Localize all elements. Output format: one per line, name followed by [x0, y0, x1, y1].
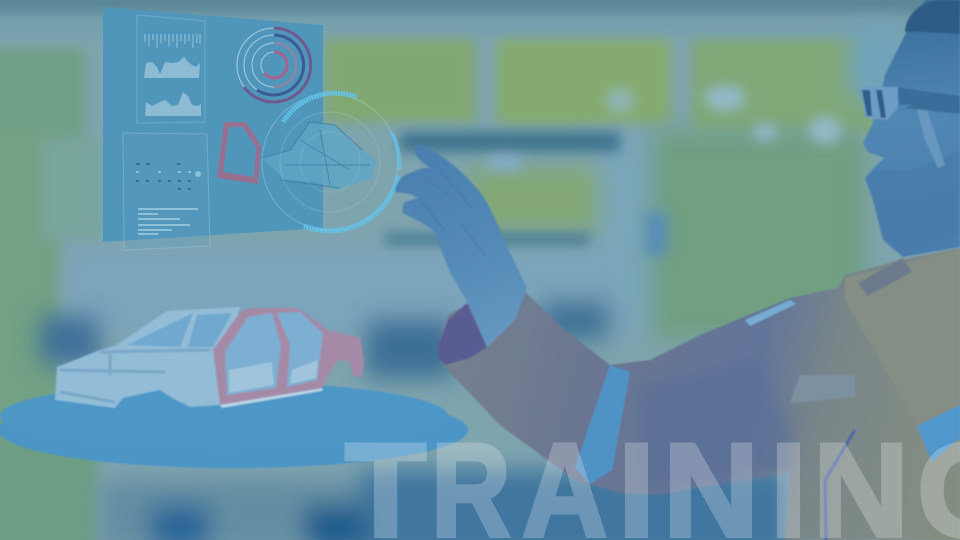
- person: [395, 0, 960, 540]
- reflective sleeve band: [575, 365, 630, 484]
- zipper: [825, 430, 855, 540]
- chart card: [137, 15, 205, 123]
- ring chart: [237, 28, 311, 102]
- cabin interior: [220, 310, 324, 398]
- jacket: [438, 248, 960, 540]
- front detail: [60, 350, 210, 402]
- platform: [0, 382, 468, 468]
- sleeve fold shadow: [640, 360, 790, 490]
- title: TRAINING: [344, 442, 960, 539]
- shoulder panel: [845, 250, 960, 425]
- temple finger: [915, 103, 945, 168]
- shoulder patch: [858, 258, 912, 296]
- glasses temple: [895, 87, 960, 114]
- hair: [905, 0, 960, 34]
- holographic dashboard panel: [103, 7, 399, 250]
- area chart bottom: [145, 92, 201, 116]
- lower interior: [229, 360, 318, 393]
- calendar card: [123, 133, 210, 250]
- rear red body section: [213, 308, 364, 405]
- reflective chest band: [917, 405, 960, 462]
- wireframe car: [262, 122, 376, 190]
- hand: [395, 145, 527, 347]
- sill: [220, 388, 323, 408]
- glasses lens: [860, 87, 898, 120]
- chest pocket: [790, 375, 855, 403]
- reflective shoulder stripe: [745, 300, 796, 326]
- fingers on face: [866, 150, 960, 257]
- red door frame: [217, 122, 261, 184]
- cuff opening: [438, 303, 487, 365]
- lens stripes: [862, 90, 886, 118]
- face and neck: [863, 0, 960, 257]
- panel background: [103, 7, 323, 242]
- area chart top: [144, 57, 200, 78]
- car body on platform: [55, 307, 364, 408]
- front white section: [55, 307, 240, 408]
- windows front: [127, 313, 232, 347]
- finger shading: [420, 170, 485, 255]
- targeting circle: [262, 93, 399, 231]
